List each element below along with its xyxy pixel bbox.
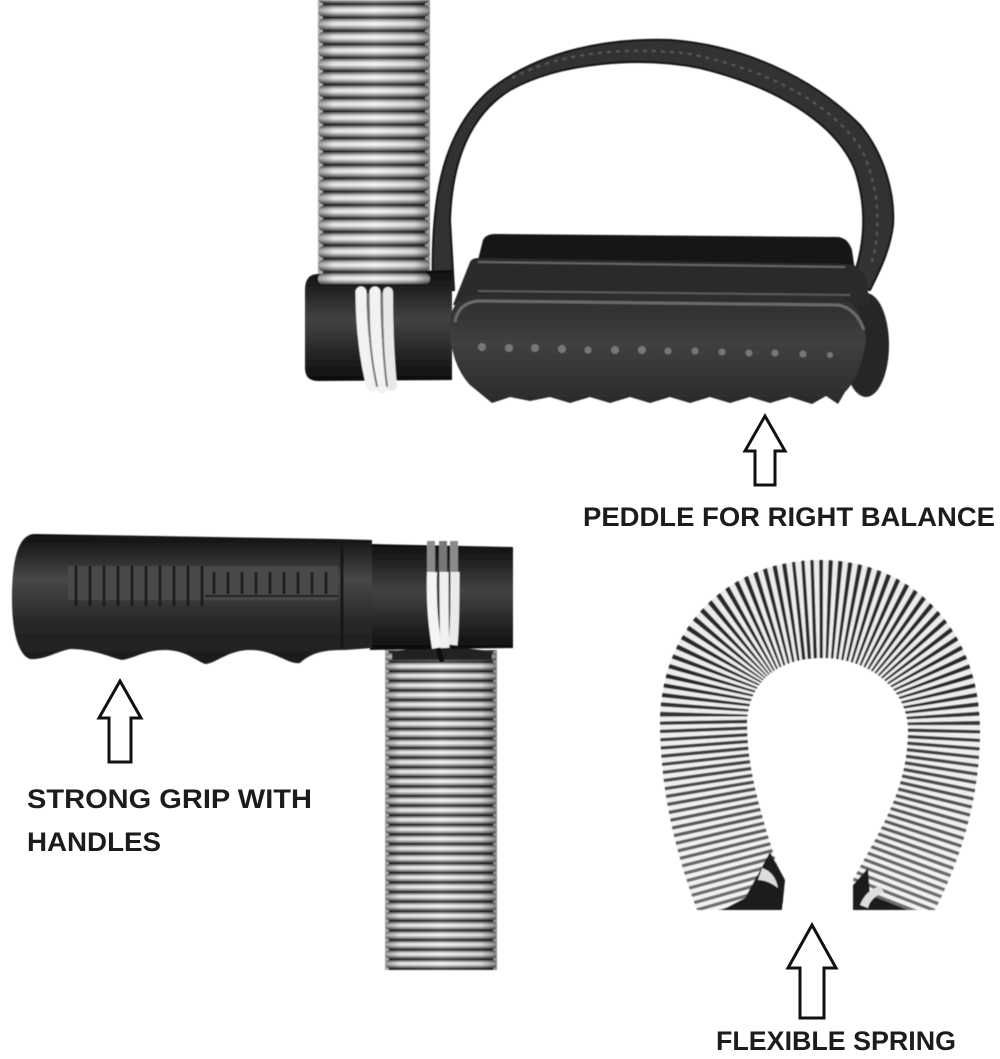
pedal face with studs bbox=[449, 262, 866, 404]
panel: flexible spring bbox=[650, 610, 990, 915]
pedal top ridge bbox=[453, 258, 870, 305]
arrow: grip bbox=[99, 681, 141, 762]
grip body bbox=[12, 534, 372, 664]
spring hook right bbox=[853, 868, 908, 910]
label: spring: FLEXIBLE SPRING bbox=[716, 1026, 956, 1056]
spring hook rings bbox=[361, 292, 392, 388]
label: grip: HANDLES bbox=[27, 827, 161, 857]
top spring bbox=[318, 0, 430, 284]
grip tube bbox=[370, 544, 513, 650]
spring hook left bbox=[722, 852, 785, 910]
hook rings bbox=[431, 541, 455, 662]
panel: grip handle bbox=[12, 534, 513, 970]
arrow: spring bbox=[788, 925, 836, 1018]
label: grip bbox=[27, 784, 312, 857]
bottom spring bbox=[385, 647, 497, 970]
pedal axle tube bbox=[305, 270, 452, 381]
label: pedal: PEDDLE FOR RIGHT BALANCE bbox=[583, 502, 995, 532]
axle end right bbox=[843, 293, 889, 397]
curved spring bbox=[650, 610, 990, 915]
arrow: pedal bbox=[745, 416, 785, 485]
label: grip: STRONG GRIP WITH bbox=[27, 784, 312, 814]
pedal back block bbox=[470, 234, 858, 292]
foot strap bbox=[433, 40, 893, 290]
panel: pedal assembly bbox=[305, 0, 893, 404]
